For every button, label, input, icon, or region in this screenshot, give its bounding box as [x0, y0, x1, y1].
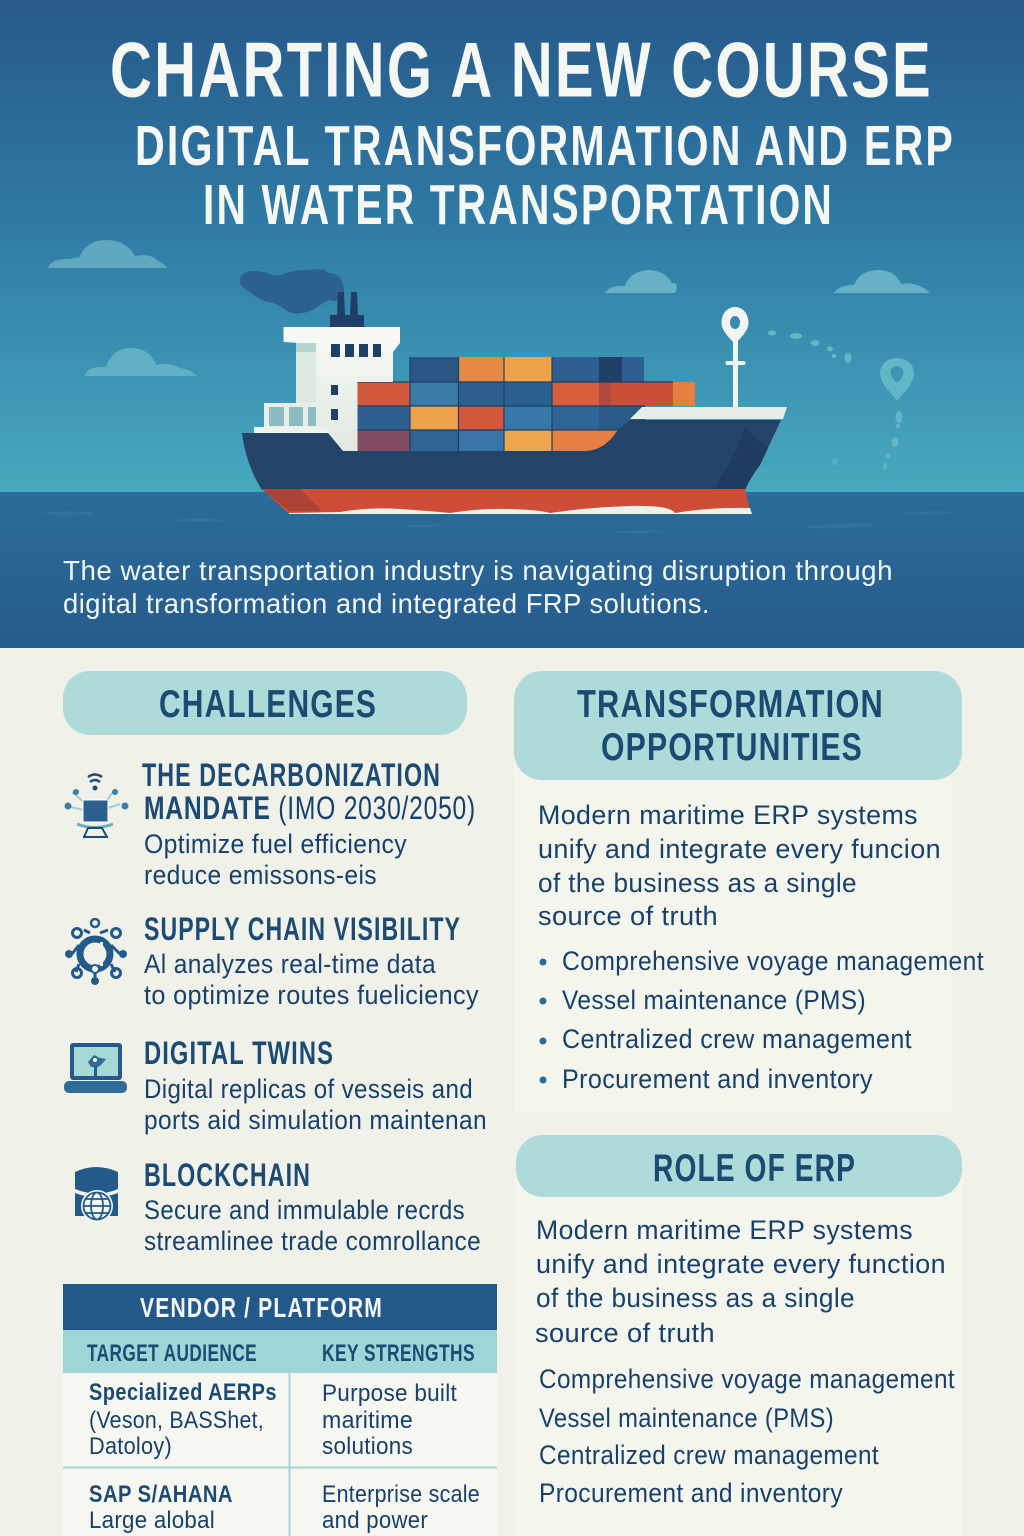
title	[110, 26, 955, 237]
icon: network virus	[65, 919, 127, 985]
paragraph: source of truth	[535, 1318, 715, 1348]
bullet list	[540, 946, 984, 1094]
item: supply chain visibility: Al analyzes real-time data	[144, 949, 436, 979]
row: specialized ERPs: (Veson, BASShet,	[89, 1407, 264, 1434]
paragraph: unify and integrate every function	[536, 1249, 946, 1279]
paragraph: source of truth	[538, 901, 718, 931]
bullet list: Centralized crew management	[562, 1024, 912, 1054]
funnel	[330, 292, 364, 327]
table: vendor platform comparison	[63, 1284, 497, 1536]
cloud: upper left	[48, 240, 167, 268]
paragraph	[538, 800, 941, 931]
bullet list: Vessel maintenance (PMS)	[562, 985, 866, 1015]
list: Vessel maintenance (PMS)	[539, 1403, 834, 1433]
item: blockchain: Secure and immulable recrds	[144, 1195, 465, 1225]
table column headers: TARGET AUDIENCE	[87, 1340, 257, 1367]
row: SAP: Enterprise scale	[322, 1481, 480, 1508]
bullet list: Procurement and inventory	[562, 1064, 873, 1094]
containers	[358, 357, 695, 451]
deck	[630, 407, 787, 419]
list	[539, 1364, 955, 1508]
hull	[242, 420, 781, 490]
list: Procurement and inventory	[539, 1478, 843, 1508]
paragraph: of the business as a single	[536, 1283, 855, 1313]
row: SAP: and power	[322, 1507, 428, 1534]
item: digital twins: ports aid simulation maintenan	[144, 1105, 487, 1135]
item: blockchain	[75, 1157, 481, 1256]
heading: challenges: CHALLENGES	[159, 683, 377, 726]
table column headers	[63, 1330, 497, 1373]
table column headers: KEY STRENGTHS	[322, 1340, 475, 1367]
item: digital twins: DIGITAL TWINS	[144, 1035, 334, 1071]
paragraph: unify and integrate every funcion	[538, 834, 941, 864]
list: Comprehensive voyage management	[539, 1364, 955, 1394]
panel: role of ERP	[516, 1135, 962, 1536]
paragraph: of the business as a single	[538, 868, 857, 898]
icon: robot monitor	[64, 774, 128, 837]
row: SAP	[89, 1481, 480, 1534]
hull bow shade	[714, 428, 768, 490]
row: specialized ERPs: Specialized AERPs	[89, 1379, 277, 1406]
item: digital twins	[64, 1035, 487, 1135]
panel: transformation opportunities	[514, 671, 984, 1112]
illustration: container ship	[242, 292, 787, 514]
row: SAP: Large alobal	[89, 1507, 215, 1534]
paragraph: Modern maritime ERP systems	[536, 1215, 913, 1245]
cloud: centre right	[605, 270, 677, 293]
heading: role of ERP: ROLE OF ERP	[653, 1147, 856, 1190]
red waterline band	[262, 489, 751, 514]
item: digital twins: Digital replicas of vesseis and	[144, 1074, 473, 1104]
white bow wave	[289, 506, 752, 514]
table title bar	[63, 1284, 497, 1330]
superstructure	[254, 327, 400, 451]
icon: laptop	[64, 1043, 127, 1093]
heading: transformation opportunities	[514, 671, 962, 780]
hero banner	[0, 0, 1024, 648]
cloud: mid left	[84, 348, 197, 376]
heading: transformation opportunities: TRANSFORMATION	[577, 683, 884, 726]
red band shade	[262, 489, 322, 511]
row: specialized ERPs: maritime	[322, 1407, 413, 1434]
item: decarbonization	[64, 757, 476, 890]
item: decarbonization: reduce emissons-eis	[144, 860, 377, 890]
cloud: right	[834, 270, 930, 293]
subtitle: digital transformation and integrated FRP solutions.	[63, 588, 710, 619]
item: supply chain visibility	[65, 911, 479, 1010]
row: SAP: SAP S/AHANA	[89, 1481, 233, 1508]
row: specialized ERPs	[89, 1379, 457, 1460]
bullet list: Comprehensive voyage management	[562, 946, 984, 976]
item: supply chain visibility: to optimize routes fueliciency	[144, 980, 479, 1010]
item: decarbonization: Optimize fuel efficiency	[144, 829, 407, 859]
table title bar: VENDOR / PLATFORM	[140, 1292, 383, 1323]
item: decarbonization: THE DECARBONIZATION	[142, 757, 441, 793]
paragraph: Modern maritime ERP systems	[538, 800, 918, 830]
item: blockchain: BLOCKCHAIN	[144, 1157, 311, 1193]
icon: faint route and location pin	[768, 330, 914, 470]
item: blockchain: streamlinee trade comrollance	[144, 1226, 481, 1256]
heading: transformation opportunities: OPPORTUNITIES	[601, 726, 863, 769]
subtitle	[63, 555, 893, 619]
panel: challenges	[63, 671, 487, 1256]
row: specialized ERPs: Datoloy)	[89, 1433, 172, 1460]
item: supply chain visibility: SUPPLY CHAIN VISIBILITY	[144, 911, 461, 947]
row: specialized ERPs: Purpose built	[322, 1380, 457, 1407]
mast with pin	[722, 307, 748, 407]
heading: role of ERP	[516, 1135, 962, 1197]
paragraph	[535, 1215, 946, 1348]
subtitle: The water transportation industry is navigating disruption through	[63, 555, 893, 586]
list: Centralized crew management	[539, 1440, 879, 1470]
icon: database globe	[75, 1167, 118, 1222]
row: specialized ERPs: solutions	[322, 1433, 413, 1460]
item: decarbonization: MANDATE (IMO 2030/2050)	[144, 790, 476, 826]
heading: challenges	[63, 671, 467, 735]
smoke plume	[240, 269, 344, 314]
